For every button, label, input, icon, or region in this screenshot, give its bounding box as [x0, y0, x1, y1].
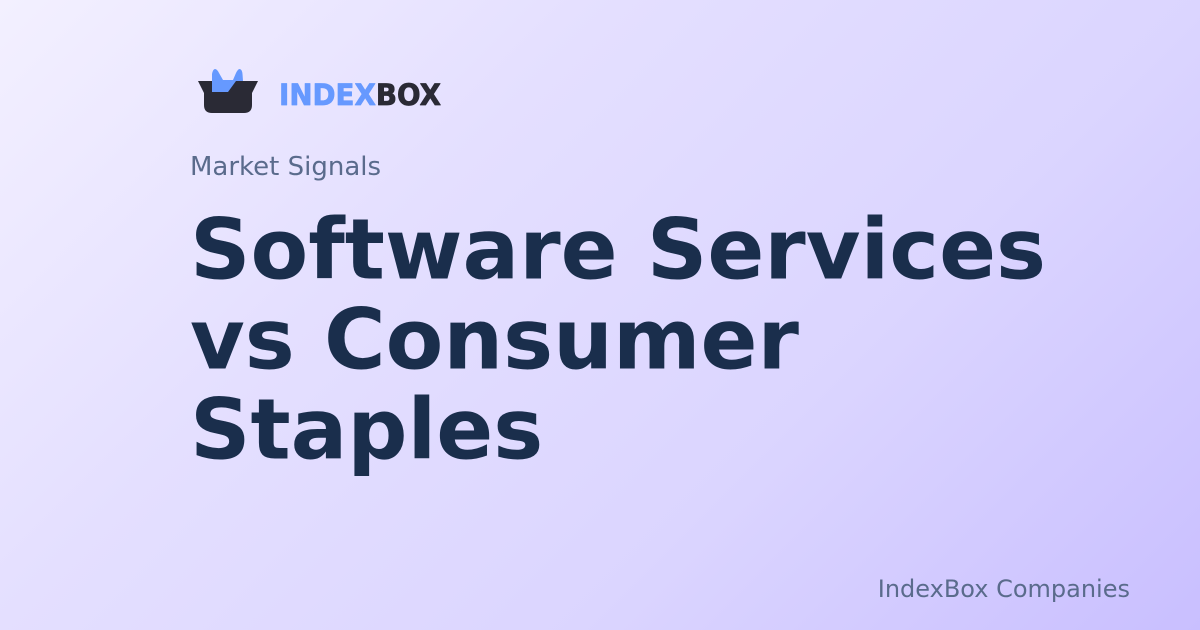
eyebrow label: Market Signals: [190, 152, 381, 182]
logo: [198, 69, 441, 113]
icon: box: [198, 69, 258, 113]
title: Staples: [190, 380, 543, 478]
title: Software Services: [190, 200, 1046, 298]
wordmark: INDEXBOX: [279, 78, 441, 112]
title: [190, 200, 1046, 478]
footer brand: IndexBox Companies: [878, 575, 1130, 603]
title: vs Consumer: [190, 290, 799, 388]
